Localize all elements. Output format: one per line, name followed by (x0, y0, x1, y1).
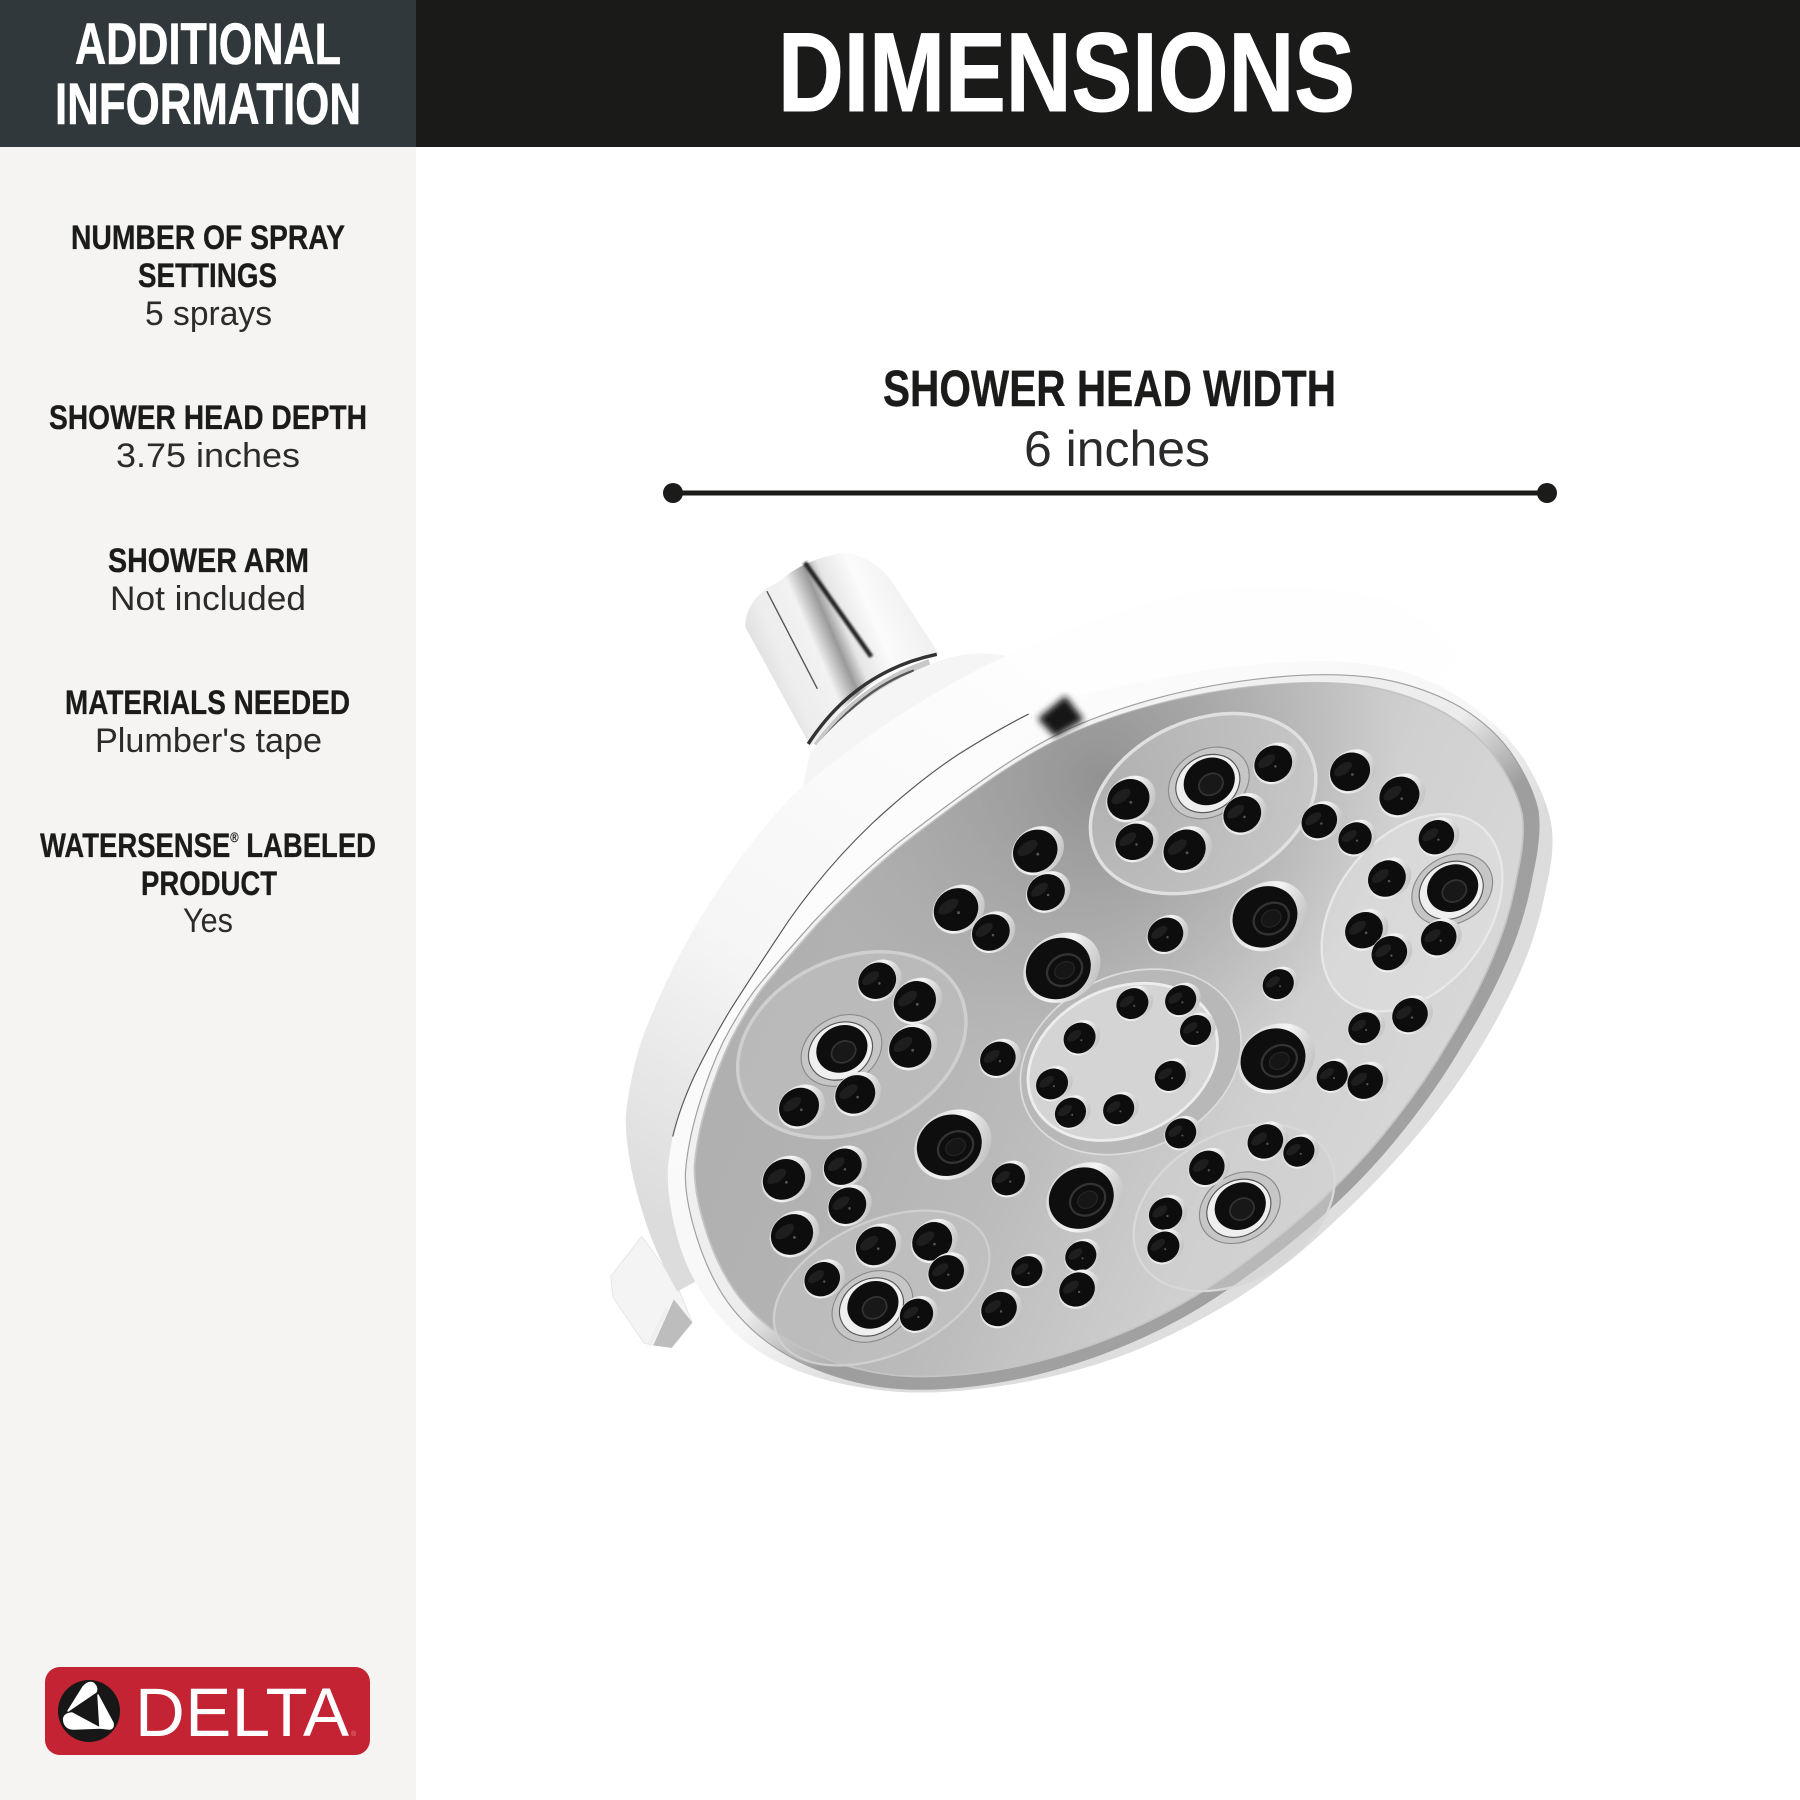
shower head illustration (611, 552, 1553, 1397)
spec: number of spray settings: 5 sprays (145, 295, 272, 333)
spray face plate (694, 683, 1523, 1376)
dimension line (663, 483, 1557, 503)
sidebar header (0, 0, 416, 147)
spray face rim (668, 661, 1553, 1393)
sidebar header: ADDITIONAL (75, 12, 341, 77)
head body (626, 586, 1458, 1292)
collar (799, 653, 1039, 827)
spec: materials needed: Plumber's tape (95, 722, 322, 760)
spec: shower head depth (49, 399, 367, 475)
panel: additional information sidebar (0, 0, 416, 1800)
chrome ring (685, 675, 1539, 1389)
sidebar header: INFORMATION (55, 72, 361, 137)
dark edge line (673, 714, 1029, 1137)
spec: shower arm: SHOWER ARM (108, 542, 309, 580)
spec: shower arm (108, 542, 309, 618)
spec: shower arm: Not included (110, 580, 306, 618)
spec: shower head depth: 3.75 inches (116, 437, 300, 475)
heading: shower head width: SHOWER HEAD WIDTH (883, 360, 1336, 417)
heading: shower head width (883, 360, 1336, 477)
heading: shower head width: 6 inches (1024, 421, 1210, 477)
spec: watersense labeled product: Yes (183, 902, 233, 940)
spray zones (707, 679, 1540, 1397)
spec: materials needed: MATERIALS NEEDED (65, 684, 350, 722)
icon: delta emblem (58, 1680, 120, 1742)
spray nozzles (752, 733, 1506, 1356)
lever (611, 1236, 692, 1348)
spec: watersense labeled product: LABELED (239, 827, 376, 865)
logo: Delta (45, 1667, 370, 1755)
logo: Delta: DELTA (135, 1674, 349, 1751)
spec: watersense labeled product: PRODUCT (141, 865, 277, 903)
spec: watersense labeled product (40, 827, 376, 940)
spec: number of spray settings: NUMBER OF SPRAY (71, 219, 345, 257)
swivel connector (745, 552, 939, 746)
logo: Delta: ® (351, 1730, 357, 1738)
spec: materials needed (65, 684, 350, 760)
spec: watersense labeled product: WATERSENSE (40, 827, 276, 865)
chrome reflection band (1038, 696, 1084, 737)
spec: number of spray settings (71, 219, 345, 333)
spec: shower head depth: SHOWER HEAD DEPTH (49, 399, 367, 437)
spec: watersense labeled product: ® (230, 829, 239, 845)
title bar: dimensions (416, 0, 1800, 147)
spec: number of spray settings: SETTINGS (138, 257, 277, 295)
title bar: dimensions: DIMENSIONS (778, 10, 1355, 135)
